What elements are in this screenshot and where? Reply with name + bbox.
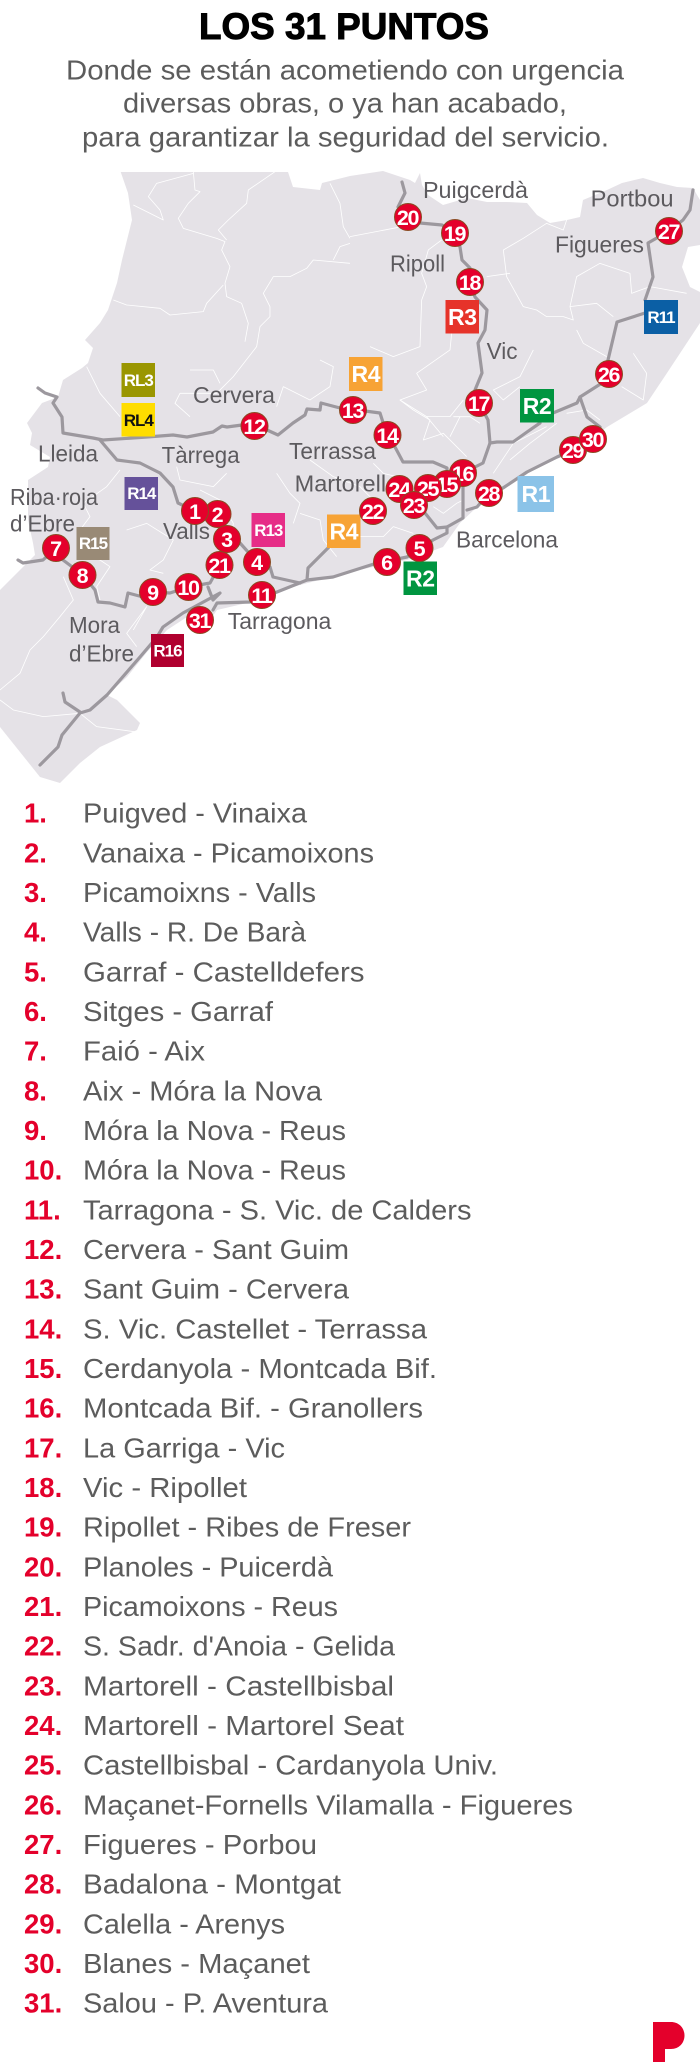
numbered list of works: Salou - P. Aventura bbox=[83, 1988, 328, 2019]
numbered markers: 26 bbox=[598, 363, 620, 387]
panel: map of Catalonia bbox=[0, 171, 700, 783]
numbered list of works: 24. bbox=[24, 1710, 62, 1741]
place labels: Barcelona bbox=[456, 527, 558, 553]
numbered markers: 24 bbox=[388, 478, 411, 502]
numbered markers: 27 bbox=[658, 220, 680, 244]
place labels: Mora bbox=[69, 612, 120, 638]
place labels: Lleida bbox=[38, 441, 98, 467]
numbered list of works: Blanes - Maçanet bbox=[83, 1948, 310, 1979]
numbered list of works: 7. bbox=[24, 1036, 47, 1067]
map landmass bbox=[0, 171, 700, 783]
numbered list of works: 6. bbox=[24, 996, 47, 1027]
numbered markers bbox=[42, 204, 682, 634]
numbered list of works: Tarragona - S. Vic. de Calders bbox=[83, 1194, 472, 1225]
place labels: Terrassa bbox=[289, 438, 376, 464]
line badges: R14 bbox=[127, 484, 157, 503]
numbered list of works: Sitges - Garraf bbox=[83, 996, 273, 1027]
numbered markers: 6 bbox=[381, 551, 393, 575]
subtitle: diversas obras, o ya han acabado, bbox=[123, 88, 567, 119]
numbered list of works: 29. bbox=[24, 1908, 62, 1939]
numbered list of works: 14. bbox=[24, 1313, 62, 1344]
numbered markers: 8 bbox=[77, 564, 89, 588]
numbered list of works: Maçanet-Fornells Vilamalla - Figueres bbox=[83, 1789, 573, 1820]
numbered list of works: Montcada Bif. - Granollers bbox=[83, 1393, 423, 1424]
numbered markers: 18 bbox=[459, 271, 481, 295]
line badges: RL4 bbox=[124, 411, 154, 430]
numbered markers: 2 bbox=[212, 503, 224, 527]
numbered markers: 21 bbox=[208, 554, 231, 578]
numbered markers: 5 bbox=[414, 537, 426, 561]
numbered list of works: Sant Guim - Cervera bbox=[83, 1274, 349, 1305]
numbered list of works: Picamoixons - Reus bbox=[83, 1591, 338, 1622]
numbered markers: 29 bbox=[562, 439, 584, 463]
numbered markers: 25 bbox=[417, 477, 439, 501]
numbered list of works: 19. bbox=[24, 1512, 62, 1543]
numbered list of works bbox=[24, 798, 573, 2019]
numbered list of works: Calella - Arenys bbox=[83, 1908, 285, 1939]
numbered markers: 16 bbox=[452, 462, 474, 486]
numbered markers: 9 bbox=[147, 581, 159, 605]
numbered markers: 7 bbox=[50, 537, 62, 561]
numbered list of works: Cervera - Sant Guim bbox=[83, 1234, 349, 1265]
line badges: R4 bbox=[351, 361, 381, 387]
line badges: RL3 bbox=[124, 371, 153, 390]
logo: P bbox=[653, 2022, 684, 2062]
numbered list of works: 12. bbox=[24, 1234, 62, 1265]
numbered markers: 10 bbox=[177, 576, 200, 600]
numbered markers: 4 bbox=[251, 551, 263, 575]
railway lines bbox=[18, 182, 693, 765]
numbered markers: 14 bbox=[376, 424, 399, 448]
numbered list of works: 28. bbox=[24, 1869, 62, 1900]
numbered list of works: 31. bbox=[24, 1988, 62, 2019]
line badges bbox=[76, 300, 678, 667]
numbered list of works: 11. bbox=[24, 1194, 61, 1225]
numbered list of works: Martorell - Martorel Seat bbox=[83, 1710, 404, 1741]
line badges: R3 bbox=[448, 304, 477, 330]
numbered list of works: Badalona - Montgat bbox=[83, 1869, 341, 1900]
numbered list of works: La Garriga - Vic bbox=[83, 1432, 285, 1463]
numbered list of works: 4. bbox=[24, 917, 47, 948]
numbered list of works: 25. bbox=[24, 1750, 62, 1781]
numbered list of works: 30. bbox=[24, 1948, 62, 1979]
line badges: R11 bbox=[647, 308, 675, 327]
numbered markers: 13 bbox=[342, 399, 364, 423]
numbered list of works: 3. bbox=[24, 877, 47, 908]
place labels: Portbou bbox=[591, 186, 674, 212]
line badges: R1 bbox=[521, 481, 551, 507]
place labels: d’Ebre bbox=[69, 641, 134, 667]
numbered list of works: Móra la Nova - Reus bbox=[83, 1155, 346, 1186]
numbered list of works: Cerdanyola - Montcada Bif. bbox=[83, 1353, 437, 1384]
place labels: Riba·roja bbox=[10, 484, 98, 510]
place labels: Vic bbox=[487, 338, 518, 364]
line badges: R2 bbox=[406, 566, 435, 592]
line badges: R13 bbox=[254, 521, 283, 540]
numbered list of works: Picamoixns - Valls bbox=[83, 877, 316, 908]
numbered list of works: 26. bbox=[24, 1789, 62, 1820]
numbered list of works: 10. bbox=[24, 1155, 62, 1186]
numbered markers: 23 bbox=[403, 494, 425, 518]
numbered list of works: Aix - Móra la Nova bbox=[83, 1075, 322, 1106]
line badges: R4 bbox=[329, 518, 359, 544]
numbered list of works: 1. bbox=[24, 798, 47, 829]
numbered markers: 31 bbox=[189, 609, 211, 633]
numbered list of works: Faió - Aix bbox=[83, 1036, 205, 1067]
numbered list of works: 9. bbox=[24, 1115, 47, 1146]
subtitle: para garantizar la seguridad del servicio. bbox=[82, 122, 609, 152]
numbered list of works: 23. bbox=[24, 1670, 62, 1701]
numbered list of works: Figueres - Porbou bbox=[83, 1829, 317, 1860]
numbered list of works: Vic - Ripollet bbox=[83, 1472, 247, 1503]
numbered markers: 19 bbox=[444, 222, 466, 246]
numbered list of works: Valls - R. De Barà bbox=[83, 917, 306, 948]
title: LOS 31 PUNTOS bbox=[199, 6, 489, 47]
numbered list of works: 22. bbox=[24, 1631, 62, 1662]
numbered list of works: 16. bbox=[24, 1393, 62, 1424]
numbered markers: 17 bbox=[468, 392, 490, 416]
numbered list of works: Ripollet - Ribes de Freser bbox=[83, 1512, 411, 1543]
place labels: Cervera bbox=[193, 382, 275, 408]
place labels: Figueres bbox=[555, 232, 644, 258]
numbered markers: 11 bbox=[251, 584, 273, 608]
numbered list of works: 20. bbox=[24, 1551, 62, 1582]
numbered list of works: S. Vic. Castellet - Terrassa bbox=[83, 1313, 427, 1344]
numbered list of works: 5. bbox=[24, 956, 47, 987]
place labels: Tarragona bbox=[228, 608, 331, 634]
numbered list of works: Puigved - Vinaixa bbox=[83, 798, 307, 829]
numbered list of works: Móra la Nova - Reus bbox=[83, 1115, 346, 1146]
numbered markers: 30 bbox=[582, 428, 604, 452]
numbered markers: 22 bbox=[362, 500, 384, 524]
county borders bbox=[0, 172, 687, 733]
numbered markers: 12 bbox=[243, 415, 266, 439]
numbered list of works: Martorell - Castellbisbal bbox=[83, 1670, 394, 1701]
line badges: R15 bbox=[79, 534, 108, 553]
numbered list of works: Planoles - Puicerdà bbox=[83, 1551, 333, 1582]
numbered list of works: 13. bbox=[24, 1274, 62, 1305]
place labels: Ripoll bbox=[390, 251, 445, 277]
numbered list of works: 21. bbox=[24, 1591, 62, 1622]
subtitle bbox=[66, 54, 624, 152]
place labels: Puigcerdà bbox=[423, 177, 528, 203]
numbered list of works: Vanaixa - Picamoixons bbox=[83, 837, 374, 868]
numbered list of works: 27. bbox=[24, 1829, 62, 1860]
numbered markers: 20 bbox=[397, 206, 419, 230]
subtitle: Donde se están acometiendo con urgencia bbox=[66, 54, 624, 86]
numbered list of works: 18. bbox=[24, 1472, 62, 1503]
place labels bbox=[10, 177, 674, 667]
numbered list of works: 15. bbox=[24, 1353, 62, 1384]
numbered markers: 28 bbox=[478, 482, 500, 506]
numbered markers: 15 bbox=[436, 473, 458, 497]
numbered markers: 3 bbox=[221, 528, 233, 552]
place labels: Tàrrega bbox=[162, 442, 240, 468]
numbered list of works: Castellbisbal - Cardanyola Univ. bbox=[83, 1750, 498, 1781]
place labels: Valls bbox=[163, 518, 210, 544]
numbered list of works: 17. bbox=[24, 1432, 62, 1463]
place labels: Martorell bbox=[295, 471, 386, 497]
numbered list of works: Garraf - Castelldefers bbox=[83, 956, 364, 987]
numbered list of works: S. Sadr. d'Anoia - Gelida bbox=[83, 1631, 395, 1662]
place labels: d’Ebre bbox=[10, 511, 75, 537]
numbered markers: 1 bbox=[189, 500, 201, 524]
line badges: R2 bbox=[523, 393, 551, 419]
numbered list of works: 8. bbox=[24, 1075, 47, 1106]
numbered list of works: 2. bbox=[24, 837, 47, 868]
line badges: R16 bbox=[153, 642, 182, 660]
